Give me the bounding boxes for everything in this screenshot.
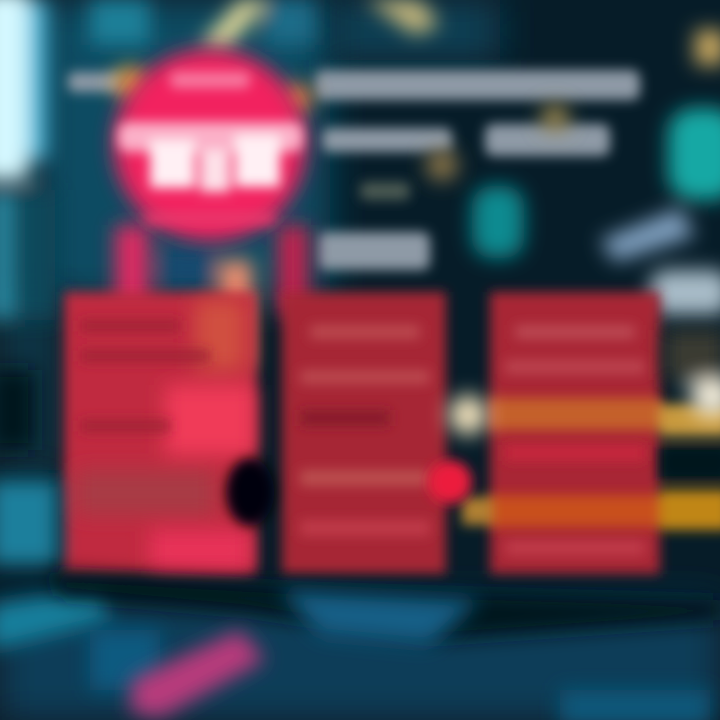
middle card text lines [300,325,430,536]
badge circle [114,49,306,241]
left card highlights [75,300,255,570]
pink badge [114,49,308,370]
orange bands across right [462,398,720,530]
badge inner text [118,72,303,224]
blue floor sweep [90,590,710,720]
accent sparks [114,66,569,181]
panel: left card [64,292,256,574]
bottom pink shape [130,630,265,718]
left light column [0,0,55,450]
panel: middle card [282,292,446,574]
teal blobs [472,108,720,315]
dark blob [226,458,274,526]
right card text lines [505,325,645,556]
heading text lines, blurred [68,70,640,270]
left card text lines [80,320,210,432]
lower-left teal panel [0,480,110,650]
badge ribbons [115,225,308,370]
dark floor band [50,572,720,640]
panel: right card [490,292,660,574]
highlights near the right band [448,330,720,435]
top streaks [90,0,720,65]
red accent circle [428,460,472,504]
